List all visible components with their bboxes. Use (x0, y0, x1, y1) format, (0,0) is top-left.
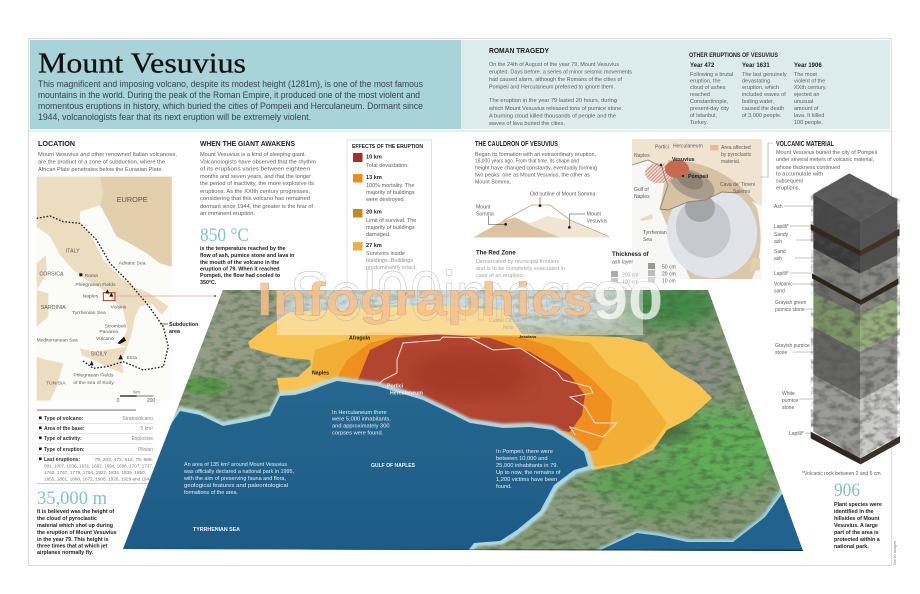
legend: area affected by pyroclastic material (710, 145, 752, 165)
text block: 18,000 years ago. From that time, its shape and (475, 158, 579, 164)
legend: area affected by pyroclastic material: Area affected (721, 145, 751, 151)
subduction line (37, 216, 168, 370)
legend item: 13 km: 100% mortality. The (366, 183, 414, 189)
text block (200, 152, 316, 217)
stat: 35,000 m: the eruption of Mount Vesuvius (37, 530, 117, 536)
column labels: Grayish green (775, 300, 807, 306)
column: year 1906: unusual (794, 99, 813, 105)
stat: 850 C: eruption of 79. When it reached (200, 266, 280, 272)
map note: Herculaneum: In Herculaneum there (332, 410, 387, 416)
diagram: mountain profile: Mount (587, 212, 602, 218)
text: the red zone: The Red Zone (476, 250, 516, 256)
text: the red zone: case of an eruption. (476, 273, 525, 279)
fact table: volcano data: Explosive (132, 436, 153, 442)
heading: Roman Tragedy: ROMAN TRAGEDY (489, 46, 549, 55)
panel: the cauldron of Vesuvius (473, 139, 676, 286)
stat: 850 C: 350°C. (200, 280, 217, 286)
fact table: volcano data: Last eruptions: (44, 457, 80, 463)
legend: thickness of ash layer (611, 252, 676, 286)
column: year 1631: included waves of (742, 92, 786, 98)
heading: THE CAULDRON OF VESUVIUS (475, 139, 558, 148)
legend item: 13 km (353, 174, 415, 203)
stat: 850 C: the mouth of the volcano in the (200, 260, 279, 266)
map labels: towns: Castel Cicala (489, 318, 520, 324)
column: year 472: Constantinople, (690, 99, 729, 105)
legend: thickness of ash layer: 10 cm (662, 278, 676, 284)
map: Italy and subduction zone (37, 177, 172, 401)
column labels: Lapilli* (789, 431, 804, 437)
image credit: Sol 90 Images (893, 541, 897, 565)
footnote: *Volcanic rock between 2 and 6 cm. (802, 471, 882, 477)
map labels: SARDINIA (41, 305, 66, 311)
stat: 906 plant species (834, 480, 882, 550)
map note: Herculaneum: and approximately 300 (332, 424, 390, 430)
column: year 1631: eruption, which (742, 85, 779, 91)
legend item: 20 km: majority of buildings (366, 225, 415, 231)
column: year 472 (690, 63, 733, 126)
stat: 35,000 m: 35,000 m (37, 488, 107, 509)
column labels: ash (774, 239, 782, 245)
column: year 1906: 100 people. (794, 120, 823, 126)
legend item: 27 km (353, 242, 417, 271)
Naples marker (103, 289, 115, 301)
column labels: Sandy (774, 232, 789, 238)
labels on the small map: Gulf of (634, 187, 649, 193)
intro text: 1944, volcanologists fear that its next eruption will be extremely violent. (38, 112, 311, 122)
stat: 906 plant species: hillsides of Mount (834, 516, 880, 522)
legend item: 20 km (353, 209, 416, 238)
legend item: 10 km: Total devastation. (366, 163, 409, 169)
legend item: 27 km: 27 km (366, 243, 382, 249)
watermark: 90 (593, 271, 663, 331)
diagram: stratigraphic column (810, 172, 901, 465)
panel: when the giant awakens (200, 139, 316, 286)
text block: an imminent eruption. (200, 211, 255, 217)
column labels: Lapilli* (774, 224, 789, 230)
zone: 10 km (358, 334, 585, 432)
labels on the small map: Tyrrhenian (643, 230, 667, 236)
map labels: towns: Herculaneum (390, 390, 423, 396)
header panel: introduction (30, 40, 461, 129)
heading: VOLCANIC MATERIAL (776, 139, 834, 148)
column: year 472: Following a brutal (690, 72, 733, 78)
main map: 3D relief of the Bay of Naples (115, 283, 810, 555)
header panel: Roman tragedy and other eruptions (461, 40, 890, 129)
municipal boundary line (378, 337, 480, 385)
heading: other eruptions: OTHER ERUPTIONS OF VESUVIUS (689, 53, 778, 59)
leader arrow (760, 143, 773, 177)
stat: 35,000 m: material which shot up during (37, 523, 113, 529)
map labels: Stromboli (105, 323, 126, 329)
diagram: mountain profile (473, 192, 609, 237)
column: year 472: of Istanbul, (690, 113, 717, 119)
fact table: volcano data: 1855, 1861, 1868, 1872, 1906, 1926, 1929 and 1944. (44, 476, 153, 482)
column labels: stone (775, 350, 787, 356)
text block: height have changed constantly, eventually forming (475, 166, 597, 172)
map note: national park: with the aim of preserving fauna and flora, (183, 476, 286, 482)
legend: area affected by pyroclastic material: by pyroclastic (721, 152, 752, 158)
map note: Pompeii (496, 449, 561, 490)
sea (115, 378, 810, 552)
column: year 1631 (742, 63, 787, 119)
column labels: sand (774, 288, 785, 294)
eruption zones (248, 305, 712, 470)
map note: national park: An area of 135 km² around Mount Vesuvius (184, 462, 287, 468)
map labels: Vulcano (96, 336, 114, 342)
map note: national park: geological features and paleontological (184, 483, 288, 489)
column: year 472: Year 472 (690, 63, 715, 69)
column labels: pumice (782, 398, 798, 404)
text: Roman Tragedy: A burning cloud killed thousands of people and the (489, 114, 616, 120)
map labels: Volsinii (111, 304, 126, 310)
legend item: 20 km: Limit of survival. The (366, 218, 416, 224)
fact table: volcano data: Plinian (138, 447, 153, 453)
stat: 906 plant species: Vesuvius. A large (834, 523, 878, 529)
map labels: Panarea (99, 329, 118, 335)
sea label: Tyrrhenian Sea: TYRRHENIAN SEA (193, 527, 241, 533)
heading: WHEN THE GIANT AWAKENS (200, 139, 295, 148)
legend heading: EFFECTS OF THE ERUPTION (352, 144, 423, 150)
text: location: are the product of a zone of subduction, where the (38, 160, 165, 166)
text block: subsequent (776, 178, 803, 184)
map labels: towns: San Paolo (519, 328, 543, 334)
text block: Mount Vesuvius is a kind of sleeping giant. (200, 152, 306, 158)
map labels: towns: Jesolano (519, 334, 537, 339)
labels on the small map: Naples (634, 194, 650, 200)
map note: Herculaneum (331, 410, 391, 436)
panel: location: 200 (147, 398, 155, 404)
legend item: 10 km: 10 km (366, 154, 382, 160)
legend item: 10 km (353, 153, 409, 169)
map labels (37, 195, 148, 394)
map note: Pompeii: between 10,000 and (496, 456, 548, 462)
stat: 906 plant species: protected within a (834, 537, 880, 543)
labels on the small map: Cava de' Tirreni (720, 182, 755, 188)
legend item: 13 km: 13 km (366, 175, 382, 181)
text block: of its eruptions varies between eighteen (200, 166, 310, 172)
column labels: Sand (774, 249, 786, 255)
labels on the small map: Vesuvius (672, 157, 695, 163)
text block (475, 152, 597, 186)
text block: under several meters of volcanic material, (776, 157, 874, 163)
text block: considering that this volcano has remained (200, 196, 310, 202)
fact table: volcano data: Area of the base: (44, 426, 85, 432)
legend: thickness of ash layer: 200 cm (622, 272, 638, 278)
labels on the small map: Portici (655, 144, 669, 150)
stat: 906 plant species: part of the area is (834, 530, 879, 536)
stat: 850 C (200, 225, 294, 286)
labels on the small map: Sea (643, 237, 652, 243)
column: year 1631: The last genuinely (742, 72, 787, 78)
stat: 850 C: flow of ash, pumice stone and lava in (200, 253, 294, 259)
stat: 906 plant species: Plant species were (834, 502, 882, 508)
legend: area affected by pyroclastic material: material. (721, 159, 740, 165)
text: the red zone (476, 250, 565, 279)
diagram: mountain profile: Vesuvius (587, 219, 608, 225)
column: year 1906: amount of (794, 106, 819, 112)
text: Roman Tragedy: which Mount Vesuvius released tons of pumice stone. (488, 106, 623, 112)
stat: 850 C: is the temperature reached by the (200, 246, 286, 252)
zone: 20 km (311, 332, 667, 467)
text: location (38, 152, 177, 173)
text block: whose thickness continued (775, 165, 840, 171)
column: year 472: eruption, the (690, 78, 721, 84)
map labels: SICILY (91, 352, 108, 358)
text block: eruptions. As the XXIth century progresses, (200, 189, 310, 195)
map labels: Roma (85, 273, 98, 279)
map labels: TUNISIA (46, 380, 66, 386)
text: the red zone: and is to be completely evacuated in (476, 266, 565, 272)
sea label: Gulf of Naples: GULF OF NAPLES (371, 463, 415, 469)
stat: 35,000 m: in the year 79. This height is (37, 537, 109, 543)
map note: national park: was officially declared a national park in 1995, (183, 469, 294, 475)
text block: the period of inactivity, the more explosive its (200, 181, 314, 187)
column: year 1906: Year 1906 (794, 63, 822, 69)
fact table: volcano data: 1760, 1767, 1779, 1794, 1822, 1834, 1839, 1850, (44, 470, 146, 476)
map labels: Phlegraean Fields (75, 282, 116, 288)
map labels: of the sea of Sicily (73, 380, 114, 386)
labels on the small map: Pompeii (688, 174, 709, 180)
fact table: volcano data (37, 410, 153, 484)
map labels: Etna (127, 355, 137, 361)
text: Roman Tragedy: Pompeii and Herculaneum preferred to ignore them. (489, 84, 615, 90)
map labels: Mediterranean Sea (37, 338, 78, 344)
heading: location: LOCATION (38, 139, 75, 148)
legend item: 27 km: Survivors inside (366, 251, 405, 257)
map labels: Adriatic Sea (119, 261, 146, 267)
legend item: 13 km: majority of buildings (366, 190, 415, 196)
map note: Pompeii: Up to now, the remains of (496, 470, 561, 476)
legend item: 27 km: buildings. Buildings (366, 258, 413, 264)
fact table: volcano data: Stratovolcano (122, 416, 153, 422)
map labels: towns: Portici (387, 384, 404, 390)
legend: thickness of ash layer: 100 cm (622, 280, 638, 286)
map note: Pompeii: 25,000 inhabitants in 79. (496, 463, 558, 469)
column labels: White (782, 391, 795, 397)
map note: Herculaneum: were 5,000 inhabitants, (331, 416, 391, 422)
labels on the small map: Herculaneum (673, 144, 703, 150)
diagram: mountain profile: Somma (476, 212, 494, 218)
map labels: ITALY (66, 249, 80, 255)
fact table: volcano data: Type of eruption: (44, 447, 85, 453)
legend: thickness of ash layer: Thickness of (612, 252, 650, 258)
zone: 13 km (337, 335, 612, 452)
panel: effects of the eruption legend (347, 140, 432, 292)
intro text (38, 79, 423, 122)
stat: 35,000 m: airplanes normally fly. (37, 550, 94, 556)
column: year 472: Turkey. (690, 120, 708, 126)
text: Roman Tragedy: waves of lava buried the cities. (488, 121, 565, 127)
fact table: volcano data: 991, 1007, 1036, 1631, 1682, 1694, 1698, 1707, 1737, (44, 464, 153, 470)
stat: 906 plant species: identified in the (834, 509, 874, 515)
map note: national park (183, 462, 294, 496)
legend item: 13 km: were destroyed. (365, 197, 406, 203)
text: location: Mount Vesuvius and other renowned Italian volcanoes, (38, 152, 177, 158)
text block: dormant since 1944, the greater is the fear of (200, 204, 313, 210)
column: year 1906: ejected an (794, 92, 819, 98)
column labels: ash (774, 256, 782, 262)
column labels (774, 204, 813, 437)
column: year 1631: caused the death (742, 106, 784, 112)
text: Roman Tragedy (488, 62, 632, 127)
column: year 1906: The most (794, 72, 817, 78)
column: year 1631: of 3,000 people. (742, 113, 782, 119)
map labels: towns: Naples (312, 370, 329, 376)
text block: two peaks: one as Mount Vesuvius, the other as (475, 172, 590, 178)
map labels: towns: Afragola (349, 336, 370, 342)
column: year 1906: lava. It killed (794, 113, 824, 119)
intro text: This magnificent and imposing volcano, despite its modest height (1281m), is one of the most famous (38, 79, 423, 89)
map labels: towns: Nola (503, 325, 514, 331)
column: year 472: cloud of ashes (690, 85, 726, 91)
fact table: volcano data: Type of volcano: (44, 416, 84, 422)
stat: 906 plant species: national park. (834, 544, 869, 550)
column labels: Volcanic (774, 282, 793, 288)
labels on the small map (634, 144, 755, 243)
subduction area label (160, 322, 198, 335)
legend item: 27 km: predominantly intact. (366, 265, 417, 271)
column labels: Ash (774, 204, 783, 210)
text block: eruptions. (776, 186, 800, 192)
subduction area label: Subduction (169, 322, 198, 328)
labels on the small map: Naples (634, 153, 650, 159)
stat: 35,000 m: three times that at which jet (37, 544, 108, 550)
leader: Naples to map (115, 295, 216, 297)
land (120, 283, 810, 555)
diagram: mountain profile: Old outline of Mount Somma (530, 192, 595, 198)
zone: 27 km (248, 305, 712, 470)
column: year 1906: violent of the (794, 78, 825, 84)
fact table: volcano data: 79, 203, 472, 512, 79, 968, (95, 457, 153, 463)
column: year 1906 (794, 63, 827, 126)
text block: months and seven years, and that the longer (200, 174, 311, 180)
column labels: Lapilli* (774, 271, 789, 277)
fact table: volcano data: 5 km² (140, 426, 153, 432)
map note: Pompeii: 1,200 victims have been (496, 477, 557, 483)
map labels: Km (133, 389, 140, 394)
labels on the small map: Salerno (733, 189, 750, 195)
text block: Volcanologists have observed that the rhythm (200, 159, 316, 165)
legend: thickness of ash layer: 20 cm (662, 272, 676, 278)
subduction area label: area (169, 329, 180, 335)
map: pyroclastic and ash area around Naples (632, 139, 770, 291)
text: Roman Tragedy: had caused alarm, although the Romans of the cities of (489, 77, 622, 83)
fact table: volcano data: Type of activity: (44, 436, 82, 442)
title: Mount Vesuvius (38, 48, 246, 80)
column: year 1631: Year 1631 (742, 63, 770, 69)
map note: Pompeii: found. (496, 484, 512, 490)
legend item: 20 km: damaged. (366, 232, 391, 238)
map note: national park: formations of the area. (184, 490, 238, 496)
text block: to accumulate with (776, 172, 823, 178)
watermark: Infographics (257, 273, 593, 325)
map labels: CORSICA (39, 271, 64, 277)
stat: 35,000 m: the cloud of pyroclastic (37, 516, 97, 522)
stat: 850 C: 850 °C (200, 225, 249, 246)
map labels: Phlegraean Fields (73, 373, 114, 379)
intro text: mountains in the world. During the peak of the Roman Empire, it produced one of the most violent and (38, 90, 420, 100)
map labels: Tyrrhenian Sea (72, 310, 106, 316)
panel: volcanic material (760, 139, 901, 477)
map labels: EUROPE (117, 195, 148, 204)
watermark: Sol90images (290, 257, 635, 335)
text: location: African Plate penetrates below the Eurasian Plate. (38, 167, 163, 173)
legend: thickness of ash layer: 50 cm (662, 264, 676, 270)
column: year 1631: boiling water, (742, 99, 775, 105)
column labels: stone (782, 405, 794, 411)
column labels: Grayish pumice (775, 343, 810, 349)
stat: 850 C: Pompeii, the flow had cooled to (200, 273, 281, 279)
text block: Mount Vesuvius buried the city of Pompeii (776, 150, 877, 156)
diagram: mountain profile: Mount (476, 205, 491, 211)
map note: Pompeii: In Pompeii, there were (496, 449, 553, 455)
column labels: pumice stone (775, 307, 805, 313)
text block: Mount Somma. (475, 180, 511, 186)
text: Roman Tragedy: erupted. Days before, a series of minor seismic movements (489, 70, 632, 76)
map labels: towns (312, 318, 543, 396)
column: year 1906: XXth century, (794, 85, 827, 91)
text block (775, 150, 877, 192)
intro text: momentous eruptions in history, which buried the cities of Pompeii and Herculaneum. Dormant since (38, 101, 423, 111)
panel: location: 0 (117, 398, 120, 404)
map labels: Naples (83, 293, 99, 299)
text: Roman Tragedy: On the 24th of August of the year 79, Mount Vesuvius (489, 62, 619, 68)
column: year 1631: devastating (742, 78, 770, 84)
legend item: 20 km: 20 km (366, 210, 382, 216)
stat: 35,000 m (37, 488, 117, 556)
column: year 472: reached (690, 92, 710, 98)
legend: thickness of ash layer: ash layer (612, 260, 633, 266)
text: Roman Tragedy: The eruption in the year 79 lasted 20 hours, during (489, 98, 617, 104)
text: the red zone: Demarcated by municipal frontiers (476, 259, 560, 265)
panel: location (37, 139, 216, 404)
stat: 906 plant species: 906 (834, 480, 860, 501)
text block: Began its formation with an extraordinary eruption, (475, 152, 596, 158)
column: year 472: present-day city (690, 106, 729, 112)
stat: 35,000 m: It is believed was the height of (37, 509, 114, 515)
map note: Herculaneum: corpses were found. (332, 430, 384, 436)
